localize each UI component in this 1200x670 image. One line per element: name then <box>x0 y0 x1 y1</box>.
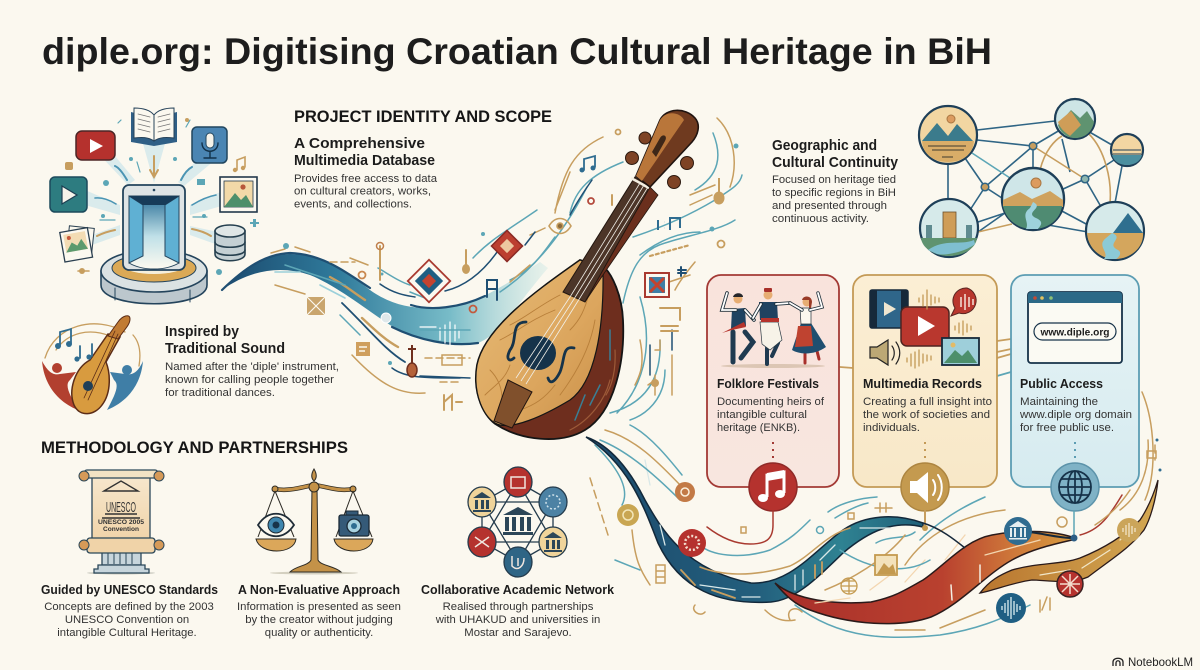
text block: academic network: Mostar and Sarajevo. <box>464 627 572 639</box>
icon: balance scale <box>256 469 373 574</box>
icon: geographic network <box>919 99 1144 260</box>
medallion: blue wave <box>996 593 1026 623</box>
text block: UNESCO standards: Concepts are defined by the 2003 <box>44 601 214 613</box>
icon: UNESCO scroll <box>79 470 164 574</box>
flow lines: around the lute and river <box>271 118 742 420</box>
panel: multimedia records: individuals. <box>863 422 920 434</box>
icon: picture tile <box>875 555 897 575</box>
text block: inspired by traditional sound: Named after the 'diple' instrument, <box>165 361 339 373</box>
icon: photo stack <box>60 226 94 262</box>
icon: browser window: www.diple.org <box>1040 326 1110 338</box>
icon: globe badge <box>1051 463 1099 511</box>
text block: geographic continuity: Focused on heritage tied <box>772 174 896 186</box>
medallion: red ornament <box>678 529 706 557</box>
text block: comprehensive multimedia database: A Comprehensive <box>294 136 425 152</box>
map circle: mountains desert <box>919 106 977 164</box>
text block: comprehensive multimedia database: events, and collections. <box>294 198 412 210</box>
text block: comprehensive multimedia database: on cultural creators, works, <box>294 186 431 198</box>
text block: UNESCO standards: intangible Cultural Heritage. <box>57 627 197 639</box>
lute back and side <box>476 260 623 439</box>
panel: public access: Maintaining the <box>1020 396 1098 408</box>
text block: comprehensive multimedia database <box>294 136 438 210</box>
text block: inspired by traditional sound: for traditional dances. <box>165 387 275 399</box>
medallion: gold wave <box>1117 518 1141 542</box>
logo: NotebookLM: NotebookLM <box>1128 655 1193 669</box>
panel: folklore festivals: Folklore Festivals <box>717 376 819 391</box>
flow lines: lower river <box>590 392 1162 637</box>
heading: methodology: METHODOLOGY AND PARTNERSHIPS <box>41 439 348 457</box>
lute face <box>476 260 603 426</box>
icon: dancers <box>721 288 826 368</box>
icon: gold globe <box>841 578 857 594</box>
medallion: red star <box>1057 571 1083 597</box>
neck and strings <box>563 177 650 302</box>
river: three-colour ribbons <box>586 437 1158 624</box>
panel: multimedia records <box>853 275 997 511</box>
medallion: brown marker <box>675 482 695 502</box>
blue ribbon <box>586 437 923 602</box>
icon: platform <box>101 250 207 304</box>
map circle: water <box>1111 134 1143 166</box>
text block: comprehensive multimedia database: Provides free access to data <box>294 173 438 185</box>
text block: comprehensive multimedia database: Multimedia Database <box>294 153 435 169</box>
icon: tan small tile <box>356 342 370 356</box>
text block: geographic continuity: continuous activity. <box>772 213 869 225</box>
icon: blue score <box>658 218 680 230</box>
map circle: central river valley <box>1002 168 1064 230</box>
text block: geographic continuity: Cultural Continuity <box>772 155 899 171</box>
panel: folklore festivals: Documenting heirs of <box>717 396 825 408</box>
text block: geographic continuity: to specific regions in BiH <box>772 187 896 199</box>
text block: non-evaluative approach: Information is presented as seen <box>237 601 401 613</box>
medallion: gold ornament <box>617 504 639 526</box>
icon: red cross tile <box>645 273 669 297</box>
icon: small lute with dancers <box>42 316 143 414</box>
map circle: tower landscape <box>920 199 978 257</box>
bridge <box>494 380 532 428</box>
text block: inspired by traditional sound: Inspired by <box>165 324 240 340</box>
river: blue sound ribbon <box>222 253 548 362</box>
text block: inspired by traditional sound: Traditional Sound <box>165 341 285 357</box>
text block: academic network: Realised through partnerships <box>443 601 594 613</box>
text block: UNESCO standards: UNESCO Convention on <box>65 614 189 626</box>
headstock <box>636 110 698 187</box>
panel: public access: www.diple org domain <box>1019 409 1132 421</box>
text block: non-evaluative approach: quality or authenticity. <box>265 627 373 639</box>
icon: red diamond <box>491 230 523 262</box>
icon: UNESCO scroll: UNESCO 2005 <box>98 519 144 526</box>
icon: red-blue diamond <box>408 260 450 302</box>
illustration: wooden diple lute <box>476 110 698 439</box>
title: diple.org: Digitising Croatian Cultural Heritage in BiH <box>42 31 992 72</box>
panel: multimedia records: Creating a full insight into <box>863 396 992 408</box>
panel: folklore festivals <box>707 275 839 511</box>
icon: tan tile <box>307 297 325 315</box>
connector lines between cards <box>840 339 1011 376</box>
icon: gold eye <box>549 218 571 234</box>
icon: microphone <box>192 127 227 163</box>
text block: inspired by traditional sound: known for calling people together <box>165 374 334 386</box>
icon: picture frame <box>220 177 257 212</box>
text block: geographic continuity: and presented through <box>772 200 887 212</box>
icon: database <box>215 225 245 261</box>
icon: tablet portal <box>123 185 185 270</box>
panel: public access: for free public use. <box>1020 422 1114 434</box>
icon: music note badge <box>749 463 797 511</box>
text block: academic network: with UHAKUD and universities in <box>435 614 600 626</box>
map circle: pyramid landscape <box>1086 202 1144 260</box>
icon: media collage <box>870 288 979 368</box>
icon: gold lute right <box>714 178 724 204</box>
panel: folklore festivals: heritage (ENKB). <box>717 422 800 434</box>
text block: geographic continuity <box>772 138 899 225</box>
text block: UNESCO standards <box>41 582 218 639</box>
text block: UNESCO standards: Guided by UNESCO Standards <box>41 582 218 597</box>
icon: red video <box>76 131 115 160</box>
panel: multimedia records: the work of societies and <box>863 409 990 421</box>
icon: small lute <box>407 345 417 377</box>
icon: UNESCO scroll: UNESCO <box>106 499 136 516</box>
text block: non-evaluative approach <box>237 582 401 639</box>
text block: academic network <box>421 582 615 639</box>
sound hole <box>520 336 556 370</box>
text block: non-evaluative approach: by the creator without judging <box>245 614 393 626</box>
panel: folklore festivals: intangible cultural <box>717 409 807 421</box>
icon: green play <box>50 177 87 212</box>
medallion: museum <box>1004 517 1032 545</box>
icon: UNESCO scroll: Convention <box>103 526 139 533</box>
icon: speaker badge <box>901 463 949 511</box>
icon: musical note <box>580 156 596 172</box>
text block: geographic continuity: Geographic and <box>772 138 877 154</box>
panel: multimedia records: Multimedia Records <box>863 376 982 391</box>
text block: inspired by traditional sound <box>165 324 339 399</box>
gold ribbon <box>980 480 1158 593</box>
heading: project identity: PROJECT IDENTITY AND SCOPE <box>294 108 552 126</box>
text block: academic network: Collaborative Academic Network <box>421 582 615 597</box>
map circle: hills <box>1055 99 1095 139</box>
f-holes <box>508 322 574 382</box>
text block: non-evaluative approach: A Non-Evaluative Approach <box>238 582 400 597</box>
icon: browser window <box>1028 292 1122 363</box>
icon: academic network <box>468 467 567 577</box>
tuning pegs <box>626 132 694 188</box>
panel: public access <box>1011 275 1139 511</box>
icon: multimedia portal cluster <box>50 108 259 304</box>
icon: open book <box>131 108 177 146</box>
panel: public access: Public Access <box>1020 376 1103 391</box>
red ribbon <box>775 531 1072 624</box>
